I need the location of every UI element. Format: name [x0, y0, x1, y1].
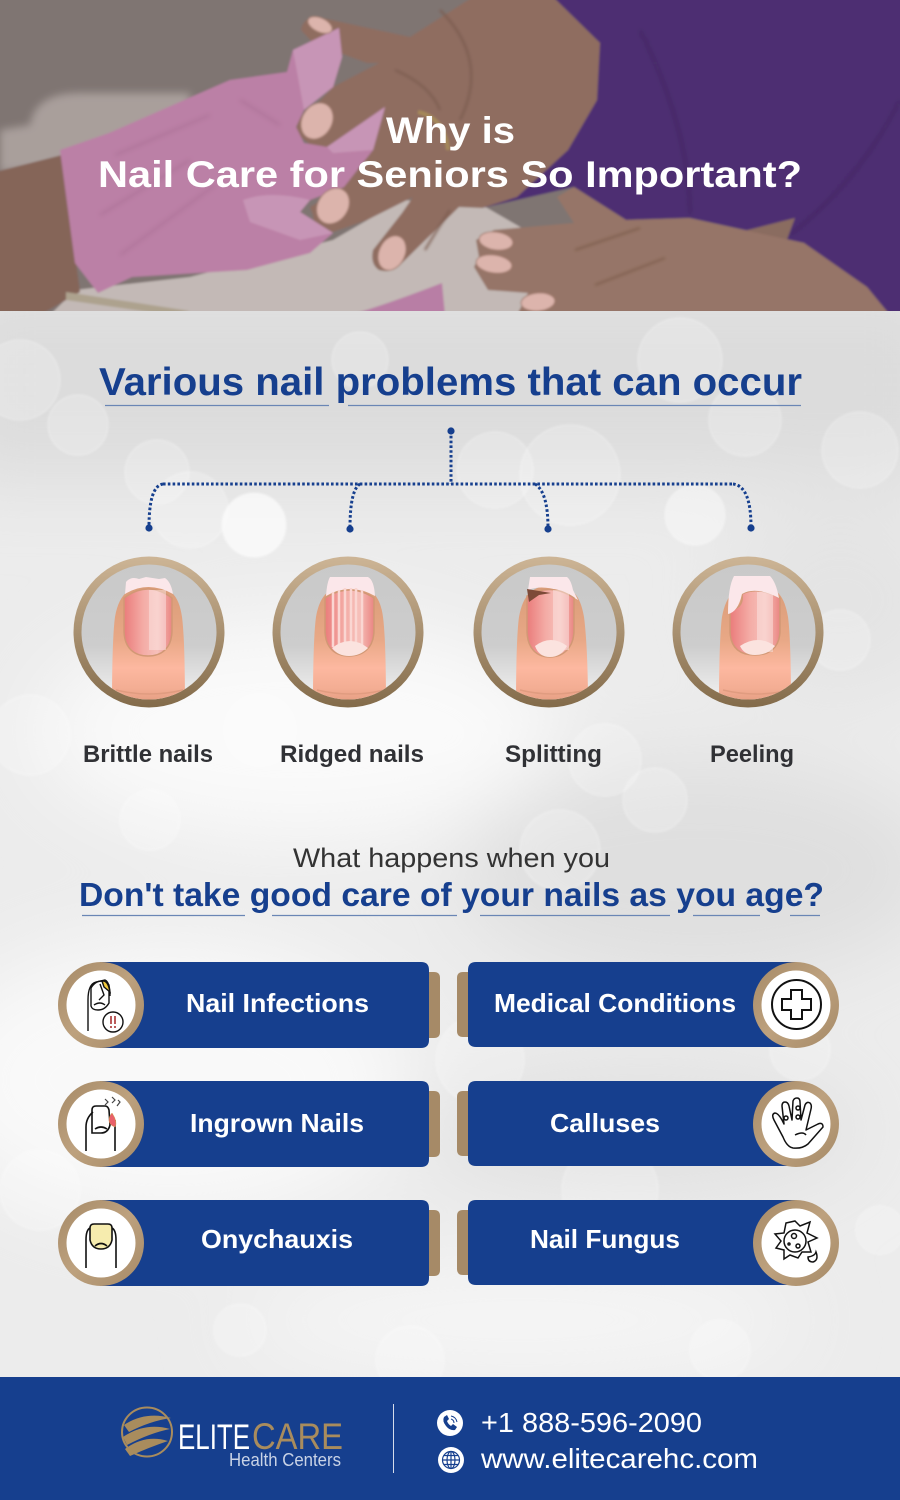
arm piece behind hand	[747, 217, 796, 240]
card: Ingrown Nails	[58, 1081, 440, 1167]
ring	[418, 112, 448, 150]
title: Why is	[386, 110, 515, 151]
subheading: What happens when you	[293, 843, 610, 873]
icon: globe	[438, 1447, 464, 1473]
card: Ingrown Nails: Ingrown Nails	[190, 1108, 364, 1138]
logo: Elite Care Health Centers	[122, 1408, 343, 1470]
icon: fungus spore	[775, 1221, 817, 1262]
title: Nail Care for Seniors So Important?	[98, 154, 802, 195]
fingernails	[295, 13, 556, 312]
icon: hand with calluses	[773, 1098, 823, 1148]
heading: various nail problems: Various nail problems that can occur	[99, 361, 802, 404]
purple sleeve	[482, 0, 900, 315]
patient's upper hand	[296, 0, 600, 271]
dotted connector tree	[145, 427, 755, 533]
left arm	[0, 155, 80, 315]
card: Medical Conditions	[457, 962, 839, 1048]
logo: Elite Care Health Centers: CARE	[252, 1416, 343, 1457]
icon: peeling nail	[672, 556, 824, 708]
glove fingertip	[360, 282, 446, 311]
background: bokeh texture	[0, 280, 900, 1394]
text: website: www.elitecarehc.com	[480, 1443, 758, 1474]
cushion	[0, 90, 192, 171]
logo: Elite Care Health Centers: ELITE	[178, 1418, 250, 1457]
card: Onychauxis	[58, 1200, 440, 1286]
nail problem labels: Brittle nails	[83, 741, 213, 768]
nail problem labels: Splitting	[505, 741, 602, 768]
icon: brittle nail	[74, 556, 224, 708]
card: Nail Fungus	[457, 1200, 839, 1286]
nail problem labels: Peeling	[710, 741, 794, 768]
heading: don't take good care: Don't take good care of your nails as you age?	[79, 876, 824, 913]
nail problem labels: Ridged nails	[280, 741, 424, 768]
card: Onychauxis: Onychauxis	[201, 1224, 353, 1254]
card: Nail Fungus: Nail Fungus	[530, 1224, 680, 1254]
card: Nail Infections	[58, 962, 440, 1048]
icon: splitting nail	[474, 556, 624, 708]
icon: ridged nail	[272, 556, 424, 708]
icon: thick yellow nail	[86, 1224, 116, 1268]
nail problem labels	[83, 741, 794, 768]
icon: ingrown nail	[86, 1097, 120, 1151]
hero photo: hands and nail care	[0, 0, 900, 315]
lilac glove	[60, 50, 373, 294]
card: Calluses: Calluses	[550, 1108, 660, 1138]
card: Medical Conditions: Medical Conditions	[494, 988, 736, 1018]
icon: phone	[437, 1410, 463, 1436]
title	[98, 110, 802, 195]
icon: cracked infected nail	[88, 980, 123, 1032]
logo: Elite Care Health Centers: Health Centers	[229, 1450, 341, 1470]
table	[52, 199, 529, 311]
card: Calluses	[457, 1081, 839, 1167]
text: phone number: +1 888-596-2090	[481, 1407, 702, 1438]
nail file	[64, 291, 188, 311]
card: Nail Infections: Nail Infections	[186, 988, 369, 1018]
lower right hand	[474, 187, 890, 315]
icon: medical cross	[772, 980, 821, 1029]
footer band	[0, 1377, 900, 1500]
